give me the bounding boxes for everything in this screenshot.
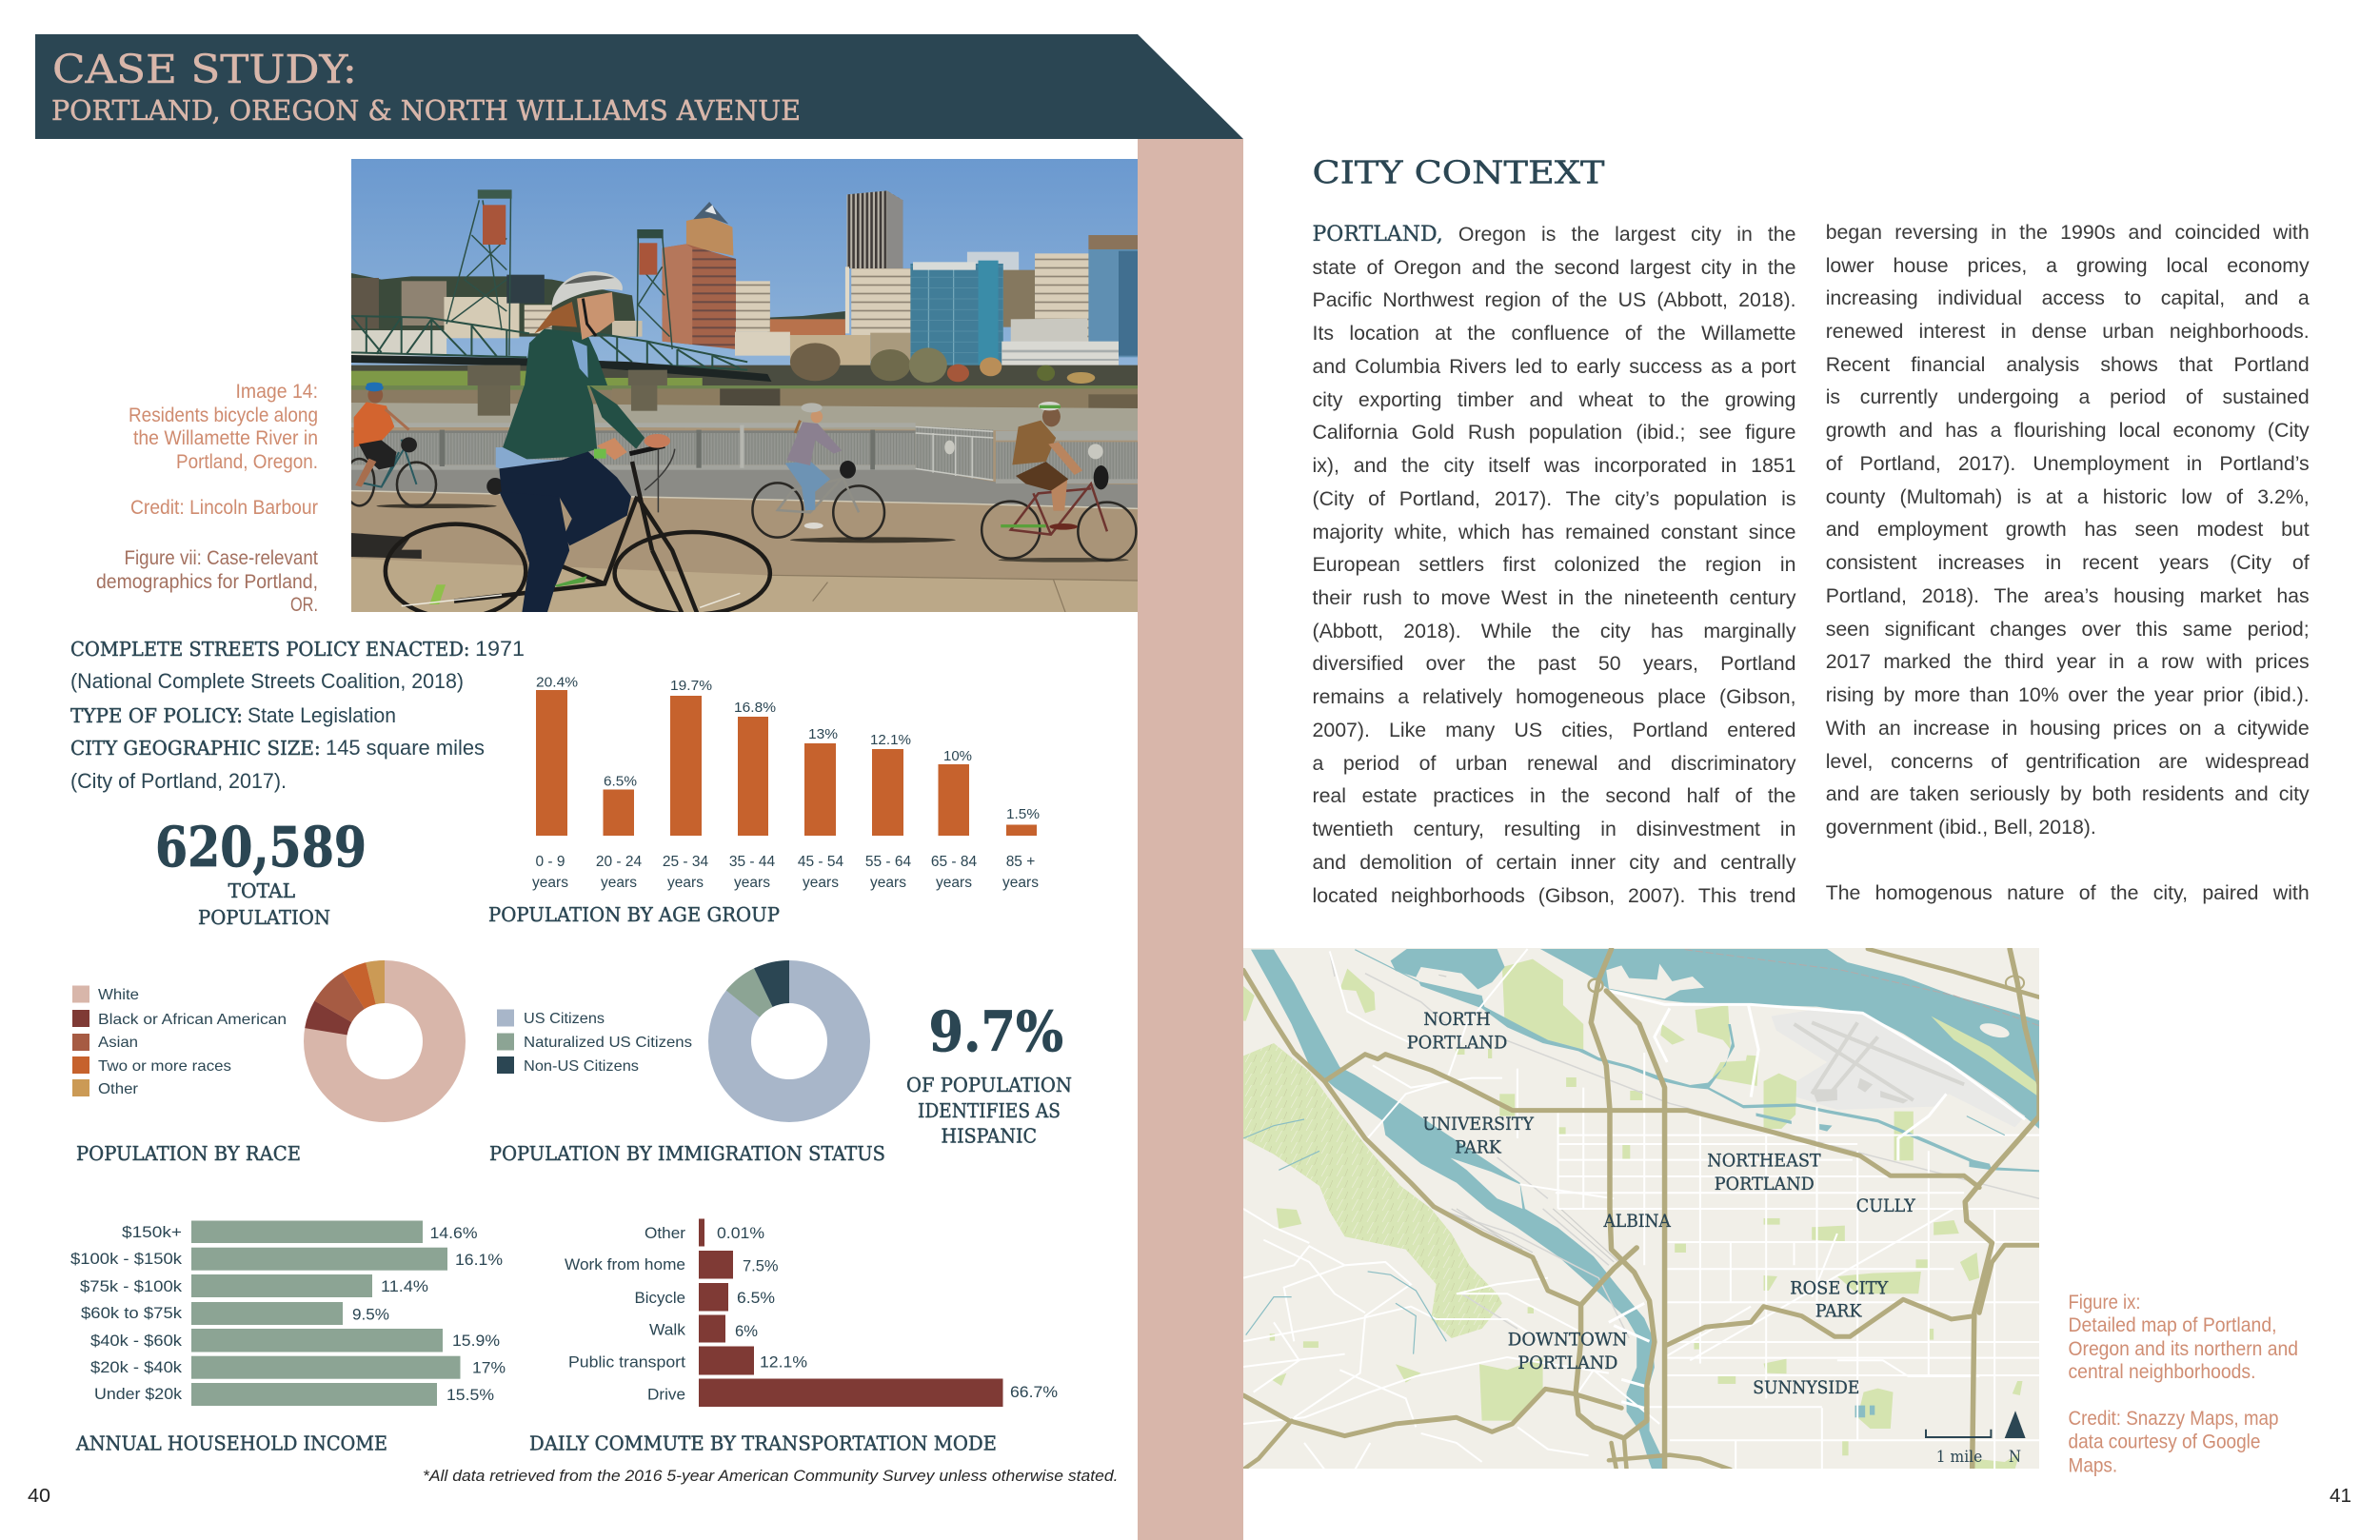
map figure caption: Credit: Snazzy Maps, map [2068, 1408, 2279, 1430]
land masses in the rivers [1451, 964, 2013, 1209]
bar chart: daily commute by transportation mode: Other [645, 1224, 685, 1242]
bar chart: population by age group: 55 - 64 [865, 854, 912, 870]
bar chart: population by age group: 1.5% [1006, 807, 1040, 822]
bar chart: population by age group: years [532, 875, 568, 891]
hispanic population stat: HISPANIC [941, 1125, 1037, 1148]
pavement [351, 491, 1138, 614]
map labels: CULLY [1856, 1196, 1916, 1216]
map figure caption: Detailed map of Portland, [2068, 1314, 2277, 1336]
body text column 2: government (ibid., Bell, 2018). [1826, 816, 2096, 839]
bar chart: population by age group: 12.1% [870, 733, 911, 748]
bar chart: annual household income: $40k - $60k [90, 1332, 183, 1350]
photo and figure captions: the Willamette River in [133, 427, 318, 449]
body text column 2: increasing individual access to capital, and a [1826, 286, 2310, 309]
map figure caption [2068, 1292, 2298, 1477]
body text column 1: their rush to move West in the nineteenth century [1312, 586, 1795, 609]
bar chart: population by age group: 65 - 84 [931, 854, 978, 870]
photo and figure captions: Image 14: [236, 381, 318, 403]
body text column 1: Its location at the confluence of the Willamette [1312, 322, 1795, 345]
map scale bar [1926, 1430, 1991, 1467]
body text column 2: lower house prices, a growing local economy [1826, 254, 2310, 277]
body text column 1: majority white, which has remained constant since [1312, 520, 1795, 543]
north arrow [2005, 1411, 2026, 1467]
policy facts text block: (City of Portland, 2017). [70, 769, 287, 793]
policy facts text block: TYPE OF POLICY: [70, 704, 243, 727]
hill streams [1243, 950, 2005, 1354]
page number 41: 41 [2330, 1486, 2351, 1507]
race legend: Asian [98, 1035, 138, 1051]
bar chart: annual household income: 15.9% [452, 1332, 500, 1350]
body text column 1: city exporting timber and wheat to the growing [1312, 388, 1795, 411]
bar chart: population by age group: years [870, 875, 906, 891]
heading: commute: DAILY COMMUTE BY TRANSPORTATION MODE [529, 1431, 997, 1454]
bar chart: population by age group: 25 - 34 [663, 854, 709, 870]
immigration legend: Non-US Citizens [524, 1058, 639, 1075]
middle cyclist [752, 403, 884, 539]
map labels [1407, 1010, 1916, 1398]
map labels: NORTH [1423, 1010, 1491, 1030]
policy facts text block: 145 square miles [326, 736, 485, 760]
bar chart: annual household income: $100k - $150k [70, 1250, 183, 1268]
map figure caption: Figure ix: [2068, 1292, 2140, 1313]
map labels: PARK [1455, 1137, 1502, 1157]
total population stat [155, 815, 367, 929]
body text column 2: and employment growth has seen modest but [1826, 518, 2310, 541]
highways [1243, 949, 2039, 1470]
photo and figure captions: demographics for Portland, [96, 571, 318, 593]
body text column 1: European settlers first colonized the region in [1312, 553, 1795, 576]
rail [1330, 951, 2039, 1338]
immigration legend [497, 1009, 692, 1075]
bar chart: annual household income: $150k+ [122, 1223, 182, 1241]
bar chart: annual household income: 15.5% [446, 1386, 494, 1404]
immigration legend: Naturalized US Citizens [524, 1035, 692, 1051]
map figure caption: data courtesy of Google [2068, 1431, 2260, 1452]
bar chart: population by age group: 10% [943, 749, 972, 764]
pink vertical column [1138, 139, 1243, 1540]
body text column 2: seen significant changes over this same period; [1826, 618, 2310, 641]
photo and figure captions [96, 381, 318, 616]
main cyclist [386, 385, 770, 618]
heading: race: POPULATION BY RACE [76, 1142, 301, 1165]
body text column 1: ix), and the city itself was incorporated in 1851 [1312, 454, 1795, 477]
bar chart: population by age group: years [667, 875, 704, 891]
bar chart: population by age group: years [936, 875, 972, 891]
parks [1243, 959, 2039, 1470]
body text column 2: consistent increases in recent years (City of [1826, 551, 2310, 574]
bar chart: population by age group: 45 - 54 [798, 854, 844, 870]
body text column 2: rising by more than 10% over the year prior (ibid.). [1826, 683, 2310, 706]
photo and figure captions: Portland, Oregon. [176, 451, 318, 473]
body text column 1: PORTLAND, Oregon is the largest city in the [1312, 223, 1795, 247]
donut chart: population by immigration status [489, 960, 885, 1165]
body text column 2: began reversing in the 1990s and coincided with [1826, 221, 2310, 244]
bar chart: population by age group: years [1002, 875, 1039, 891]
map labels: NORTHEAST [1707, 1151, 1821, 1171]
right cyclist [982, 402, 1136, 561]
bar chart: population by age group: years [803, 875, 839, 891]
railing [351, 423, 916, 427]
bar chart: population by age group: 20 - 24 [596, 854, 643, 870]
hispanic population stat: IDENTIFIES AS [918, 1099, 1061, 1122]
race legend: White [98, 987, 139, 1003]
immigration legend: US Citizens [524, 1011, 605, 1027]
bar chart: population by age group: 0 - 9 [535, 854, 565, 870]
left cyclist [345, 384, 436, 506]
bar chart: annual household income: 14.6% [430, 1224, 478, 1242]
bar chart: daily commute by transportation mode: Bicycle [634, 1289, 685, 1307]
north arrow: N [2009, 1448, 2021, 1467]
bar chart: population by age group: 19.7% [670, 679, 712, 694]
map of Portland [1243, 948, 2039, 1470]
bar chart: annual household income: 17% [472, 1359, 506, 1376]
bar chart: daily commute by transportation mode: 0.01% [717, 1224, 764, 1242]
photo and figure captions: OR. [290, 594, 318, 616]
body text column 1: diversified over the past 50 years, Portland [1312, 652, 1795, 675]
body text column 2: county (Multomah) is at a historic low of 3.2%, [1826, 485, 2310, 508]
data source footnote: *All data retrieved from the 2016 5-year American Community Survey unless otherwise stated. [423, 1467, 1118, 1485]
bar chart: daily commute by transportation mode: 12.1% [760, 1353, 807, 1371]
photo: cyclists along the Willamette River [345, 159, 1138, 618]
photo and figure captions: Figure vii: Case-relevant [124, 547, 318, 569]
bar chart: annual household income [70, 1220, 506, 1454]
body text column 1: located neighborhoods (Gibson, 2007). This trend [1312, 884, 1795, 907]
policy facts text block: (National Complete Streets Coalition, 2018) [70, 669, 464, 693]
race legend: Two or more races [98, 1058, 231, 1075]
bar chart: population by age group: years [601, 875, 637, 891]
total population stat: 620,589 [155, 815, 367, 879]
hispanic population stat: 9.7% [929, 999, 1063, 1064]
policy facts text block: State Legislation [248, 703, 396, 727]
body text column 1: twentieth century, resulting in disinvestment in [1312, 818, 1795, 840]
map figure caption: Maps. [2068, 1454, 2117, 1477]
heading: city context: CITY CONTEXT [1312, 154, 1605, 190]
bar chart: population by age group: 13% [808, 727, 838, 742]
map labels: PORTLAND [1407, 1034, 1507, 1054]
subtitle: location: PORTLAND, OREGON & NORTH WILLIAMS AVENUE [51, 94, 801, 127]
race legend: Black or African American [98, 1012, 287, 1028]
bar chart: population by age group: 6.5% [604, 775, 637, 790]
body text column 2: With an increase in housing prices on a citywide [1826, 717, 2310, 740]
body text column 1 [1312, 223, 1795, 907]
bar chart: population by age group [488, 676, 1040, 926]
body text column 2: The homogenous nature of the city, paired with [1826, 881, 2310, 904]
bar chart: annual household income: 9.5% [352, 1306, 389, 1323]
map figure caption: central neighborhoods. [2068, 1361, 2256, 1383]
bar chart: population by age group: 20.4% [536, 676, 578, 691]
map labels: PORTLAND [1517, 1353, 1617, 1373]
race legend [72, 986, 287, 1097]
map labels: ROSE CITY [1790, 1278, 1889, 1298]
bar chart: annual household income: $60k to $75k [81, 1304, 183, 1322]
map labels: SUNNYSIDE [1753, 1378, 1859, 1398]
bar chart: population by age group: 35 - 44 [729, 854, 776, 870]
policy facts text block [70, 637, 525, 793]
bridge truss [351, 316, 747, 370]
bar chart: annual household income: 16.1% [455, 1251, 503, 1269]
body text column 1: California Gold Rush population (ibid.; see figure [1312, 421, 1795, 444]
donut chart: population by race [72, 960, 444, 1165]
body text column 1: 2007). Like many US cities, Portland entered [1312, 719, 1795, 741]
streets [1243, 949, 2039, 1470]
map labels: UNIVERSITY [1422, 1115, 1535, 1135]
heading: immigration: POPULATION BY IMMIGRATION STATUS [489, 1142, 885, 1165]
body text column 2: of Portland, 2017). Unemployment in Portland’s [1826, 452, 2310, 475]
body text column 1: real estate practices in the second half of the [1312, 784, 1795, 807]
body text column 2: renewed interest in dense urban neighborhoods. [1826, 320, 2310, 343]
hispanic population stat [906, 999, 1072, 1148]
photo and figure captions: Residents bicycle along [129, 405, 318, 426]
bar chart: daily commute by transportation mode: Work from home [565, 1255, 685, 1273]
body text column 1: Pacific Northwest region of the US (Abbott, 2018). [1312, 288, 1795, 311]
total population stat: TOTAL [228, 879, 295, 902]
bar chart: annual household income: $20k - $40k [90, 1358, 183, 1376]
body text column 1: (Abbott, 2018). While the city has marginally [1312, 620, 1795, 642]
body text column 1: and Columbia Rivers led to early success as a port [1312, 355, 1795, 378]
bar chart: annual household income: Under $20k [94, 1385, 183, 1403]
map labels: DOWNTOWN [1508, 1331, 1628, 1351]
body text column 1: (City of Portland, 2017). The city’s population is [1312, 487, 1795, 510]
airport [1794, 1020, 2025, 1117]
body text column 2: and are taken seriously by both residents and city [1826, 782, 2310, 805]
body text column 1: a period of urban renewal and discriminatory [1312, 752, 1795, 775]
body text column 2: Portland, 2018). The area’s housing market has [1826, 584, 2310, 607]
bar chart: daily commute by transportation mode: Drive [647, 1386, 685, 1403]
policy facts text block: CITY GEOGRAPHIC SIZE: [70, 737, 321, 760]
water [1251, 949, 2039, 1470]
bar chart: annual household income: 11.4% [381, 1277, 428, 1295]
map labels: ALBINA [1603, 1212, 1671, 1232]
body text column 2 [1826, 221, 2310, 904]
bar chart: daily commute by transportation mode [529, 1218, 1058, 1454]
heading: age group: POPULATION BY AGE GROUP [488, 903, 780, 926]
bridge towers [446, 194, 672, 356]
body text column 1: state of Oregon and the second largest city in the [1312, 256, 1795, 279]
body text column 2: Recent financial analysis shows that Portland [1826, 353, 2310, 376]
bar chart: daily commute by transportation mode: 6.5% [737, 1289, 775, 1307]
bar chart: daily commute by transportation mode: 7.5% [743, 1256, 779, 1275]
map scale bar: 1 mile [1936, 1448, 1982, 1467]
bar chart: population by age group: 16.8% [734, 701, 776, 716]
bar chart: population by age group: 85 + [1006, 854, 1035, 870]
body text column 2: level, concerns of gentrification are widespread [1826, 750, 2310, 773]
body text column 2: growth and has a flourishing local economy (City [1826, 419, 2310, 442]
map figure caption: Oregon and its northern and [2068, 1338, 2298, 1360]
race legend: Other [98, 1081, 139, 1097]
body text column 2: 2017 marked the third year in a row with prices [1826, 650, 2310, 673]
bar chart: population by age group: years [734, 875, 770, 891]
title: case study: CASE STUDY: [52, 47, 357, 92]
bar chart: daily commute by transportation mode: 66.7% [1010, 1383, 1058, 1401]
body text column 1: and demolition of certain inner city and centrally [1312, 851, 1795, 874]
body text column 2: is currently undergoing a period of sustained [1826, 385, 2310, 408]
map labels: PARK [1815, 1302, 1862, 1322]
bar chart: daily commute by transportation mode: Public transport [568, 1353, 685, 1371]
page number 40: 40 [28, 1486, 50, 1507]
body text column 1: remains a relatively homogeneous place (Gibson, [1312, 685, 1795, 708]
bar chart: daily commute by transportation mode: Walk [649, 1321, 686, 1338]
bar chart: annual household income: $75k - $100k [80, 1277, 183, 1295]
total population stat: POPULATION [198, 906, 330, 929]
hispanic population stat: OF POPULATION [906, 1074, 1072, 1096]
policy facts text block: COMPLETE STREETS POLICY ENACTED: [70, 638, 470, 661]
title banner [35, 34, 1243, 139]
bar chart: daily commute by transportation mode: 6% [735, 1322, 758, 1340]
policy facts text block: 1971 [475, 637, 525, 661]
map labels: PORTLAND [1715, 1175, 1815, 1194]
photo and figure captions: Credit: Lincoln Barbour [130, 497, 318, 519]
heading: income: ANNUAL HOUSEHOLD INCOME [75, 1431, 387, 1454]
woman's head and jacket [525, 328, 608, 387]
